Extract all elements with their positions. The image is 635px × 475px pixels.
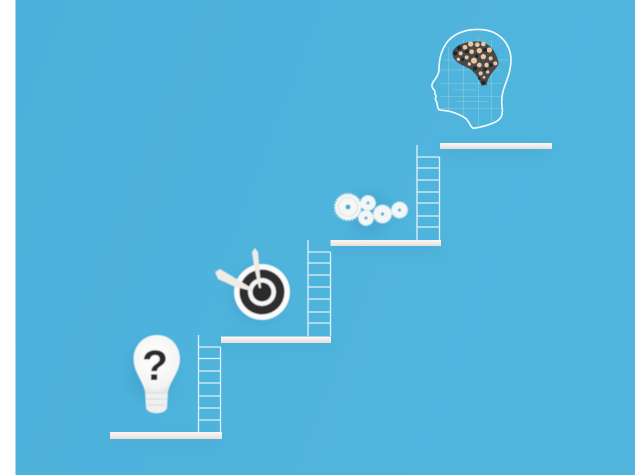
soft shadows <box>112 148 550 443</box>
shelf 1 <box>110 432 222 439</box>
right gear <box>392 202 408 218</box>
shelf 4 <box>440 143 552 149</box>
icon: light bulb with question mark <box>134 335 180 413</box>
question mark: ? <box>142 342 168 390</box>
medium gear <box>374 205 392 223</box>
wireframe lines <box>439 37 508 125</box>
dart 2 <box>252 248 261 288</box>
dart 1 <box>215 269 253 291</box>
ladder 3 <box>417 145 440 240</box>
ladder 1 <box>198 335 220 432</box>
icon: wireframe head with brain <box>432 29 511 128</box>
icon: cog wheels <box>335 194 408 226</box>
brain <box>453 41 499 86</box>
shelf steps <box>110 143 552 439</box>
icon: target with darts <box>215 248 290 320</box>
shelf 2 <box>221 336 331 343</box>
small gear 2 <box>358 210 374 226</box>
shelf 3 <box>330 240 441 246</box>
small gear 1 <box>360 196 376 210</box>
large gear <box>335 194 361 220</box>
head outline <box>432 29 511 128</box>
ladder 2 <box>308 240 330 336</box>
